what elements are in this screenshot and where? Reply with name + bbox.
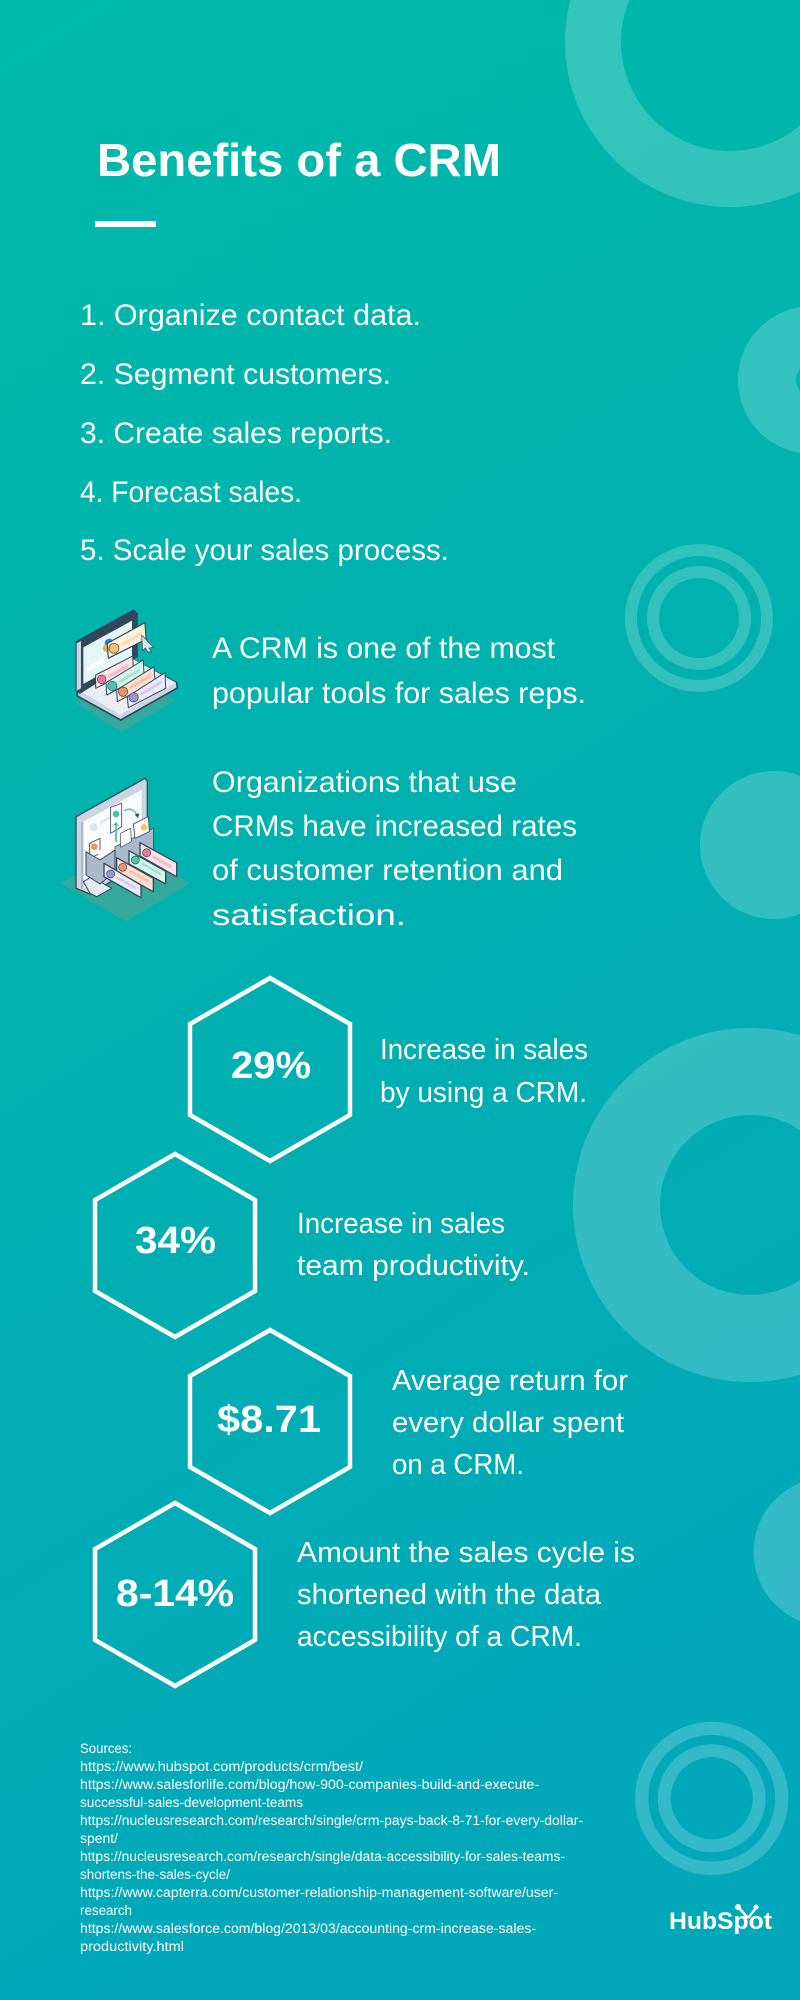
stat: 34%: Increase in sales (297, 1208, 505, 1240)
sources: https://www.hubspot.com/products/crm/best/ (80, 1759, 363, 1774)
sources: https://www.capterra.com/customer-relationship-management-software/user- (80, 1885, 558, 1900)
numbered benefits list: 5. Scale your sales process. (80, 534, 449, 567)
stat: 8-14%: accessibility of a CRM. (297, 1621, 582, 1653)
text: retention and satisfaction (212, 766, 577, 932)
numbered benefits list: 2. Segment customers. (80, 358, 391, 391)
icon: laptop with contact cards (76, 610, 177, 732)
numbered benefits list: 4. Forecast sales. (80, 476, 302, 509)
stat: 34%: team productivity. (297, 1250, 530, 1282)
sources: spent/ (80, 1831, 118, 1846)
background decorative rings (593, 0, 800, 1868)
stat: 29%: by using a CRM. (380, 1077, 587, 1109)
text: retention and satisfaction: Organizations that use (212, 766, 517, 799)
stat: 29% (190, 978, 588, 1161)
sources: https://www.salesforlife.com/blog/how-900-companies-build-and-execute- (80, 1777, 539, 1792)
text: popular tools: popular tools for sales reps. (212, 677, 586, 710)
stat: 8-14%: shortened with the data (297, 1579, 602, 1611)
sources: https://nucleusresearch.com/research/single/crm-pays-back-8-71-for-every-dollar- (80, 1813, 583, 1828)
stat: 34%: 34% (135, 1220, 216, 1262)
stat: 8-14%: Amount the sales cycle is (297, 1537, 635, 1569)
sources: https://nucleusresearch.com/research/single/data-accessibility-for-sales-teams- (80, 1849, 565, 1864)
icon: monitor with folders and cards (60, 778, 191, 922)
stat: $8.71: Average return for (392, 1365, 628, 1397)
stat: 8-14%: 8-14% (116, 1573, 234, 1615)
stat: $8.71: every dollar spent (392, 1407, 624, 1439)
text: retention and satisfaction: CRMs have increased rates (212, 810, 577, 843)
stat: $8.71 (190, 1330, 628, 1513)
text: popular tools: A CRM is one of the most (212, 632, 556, 665)
stat: 29%: 29% (231, 1045, 311, 1087)
numbered benefits list: 1. Organize contact data. (80, 299, 421, 332)
sources: Sources: (80, 1741, 132, 1756)
sources: productivity.html (80, 1939, 184, 1954)
sources: shortens-the-sales-cycle/ (80, 1867, 230, 1882)
stat: $8.71: on a CRM. (392, 1449, 524, 1481)
text: retention and satisfaction: satisfaction. (212, 899, 406, 932)
numbered benefits list (80, 299, 449, 567)
stat: 34% (95, 1154, 530, 1337)
title underline (95, 221, 156, 227)
HubSpot logo: HubSpot (669, 1908, 772, 1935)
sources: successful-sales-development-teams (80, 1795, 303, 1810)
text: popular tools (212, 632, 586, 710)
sources: research (80, 1903, 132, 1918)
numbered benefits list: 3. Create sales reports. (80, 417, 392, 450)
sources: https://www.salesforce.com/blog/2013/03/accounting-crm-increase-sales- (80, 1921, 536, 1936)
stat: 8-14% (95, 1503, 635, 1686)
stat: 29%: Increase in sales (380, 1034, 588, 1066)
title: Benefits of a CRM (97, 134, 501, 186)
text: retention and satisfaction: of customer retention and (212, 854, 563, 887)
stat: $8.71: $8.71 (217, 1399, 321, 1441)
sources (80, 1741, 583, 1954)
